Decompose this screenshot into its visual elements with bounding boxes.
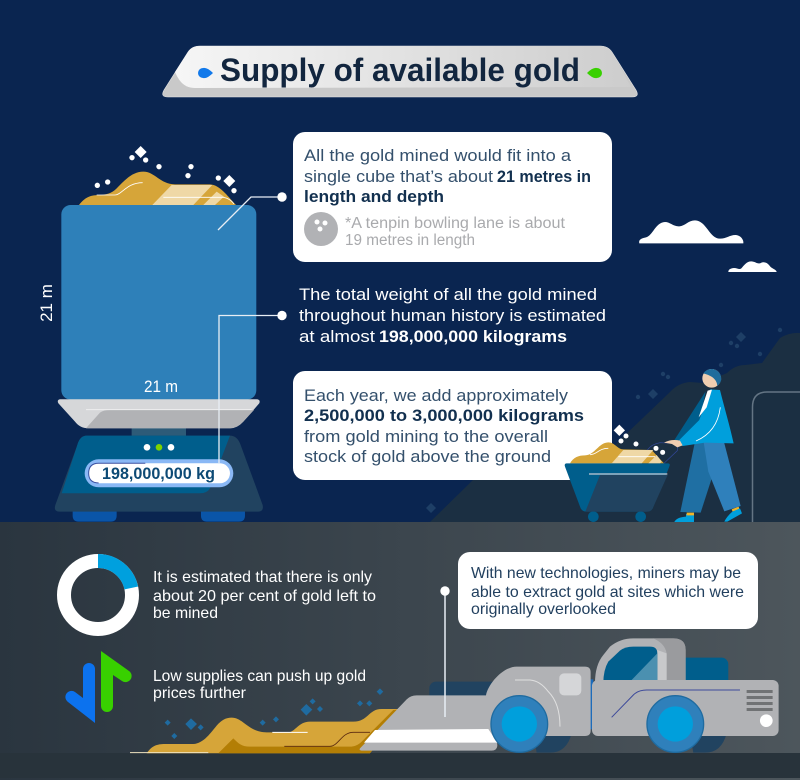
panel: cube fact — [293, 132, 612, 262]
lower ground band — [0, 522, 800, 780]
panel: new technologies: able to extract gold at sites which were — [471, 584, 744, 601]
text: gold left: be mined — [153, 605, 218, 622]
cube height label: 21 m — [37, 284, 56, 322]
cart gold — [570, 442, 664, 463]
text: low supplies: Low supplies can push up gold — [153, 668, 366, 685]
clouds — [639, 220, 777, 272]
cart sparkles — [614, 425, 665, 455]
cab — [595, 638, 686, 683]
text: gold left: about 20 per cent of gold left to — [153, 588, 376, 605]
text: low supplies — [153, 668, 366, 702]
panel: cube fact: All the gold mined would fit into a — [304, 146, 572, 165]
cube — [61, 205, 256, 400]
cart handle — [647, 443, 678, 463]
tray — [58, 399, 260, 428]
panel: new technologies: originally overlooked — [471, 601, 616, 618]
panel: cube fact: *A tenpin bowling lane is about — [345, 215, 566, 232]
scale feet — [73, 510, 245, 522]
person — [664, 369, 742, 522]
panel: cube fact: length and depth — [304, 187, 444, 206]
blue diamonds — [165, 688, 383, 739]
panel: cube fact: 21 metres in — [497, 167, 591, 186]
text block: total weight — [299, 285, 606, 346]
mountain backdrop — [430, 333, 800, 522]
panel: yearly additions: stock of gold above the ground — [304, 447, 551, 466]
scale — [55, 399, 263, 522]
title banner — [163, 46, 637, 97]
donut chart: 20 per cent — [64, 561, 132, 629]
panel: cube fact: 19 metres in length — [345, 232, 475, 249]
cube width label: 21 m — [144, 377, 178, 396]
faded diamonds in sky — [426, 328, 782, 513]
leader line: weight to scale — [219, 311, 287, 463]
panel: yearly additions: 2,500,000 to 3,000,000 kilograms — [304, 406, 584, 425]
text block: total weight: at almost — [299, 327, 375, 346]
title banner: Supply of available gold — [220, 52, 580, 88]
miner pushing cart — [565, 369, 742, 522]
scale reading: 198,000,000 kg — [102, 465, 215, 483]
panel: yearly additions — [293, 371, 612, 480]
leader line: cube to panel — [218, 192, 287, 230]
icon: bowling ball — [304, 212, 338, 246]
text: gold left — [153, 569, 376, 622]
panel: new technologies — [458, 552, 758, 629]
panel: cube fact: single cube that’s about — [304, 167, 493, 186]
loader bucket and front body — [360, 667, 591, 751]
door frame — [752, 392, 800, 522]
panel: yearly additions: Each year, we add approximately — [304, 386, 569, 405]
text block: total weight: 198,000,000 kilograms — [379, 327, 567, 346]
text: low supplies: prices further — [153, 685, 247, 702]
text block: total weight: throughout human history is estimated — [299, 306, 606, 325]
text: gold left: It is estimated that there is only — [153, 569, 372, 586]
mining truck — [360, 638, 779, 753]
sparkles — [95, 146, 237, 193]
leader line: technology to truck — [440, 586, 450, 717]
gold cube with pile — [61, 146, 256, 400]
rear body — [592, 680, 779, 736]
icon: up and down arrows — [65, 651, 132, 723]
gold terrain — [130, 688, 407, 753]
gold pile on cube — [79, 172, 236, 205]
cart — [565, 463, 670, 522]
panel: yearly additions: from gold mining to the overall — [304, 427, 548, 446]
text block: total weight: The total weight of all the gold mined — [299, 285, 597, 304]
panel: new technologies: With new technologies, miners may be — [471, 565, 741, 582]
wheels — [491, 696, 704, 752]
